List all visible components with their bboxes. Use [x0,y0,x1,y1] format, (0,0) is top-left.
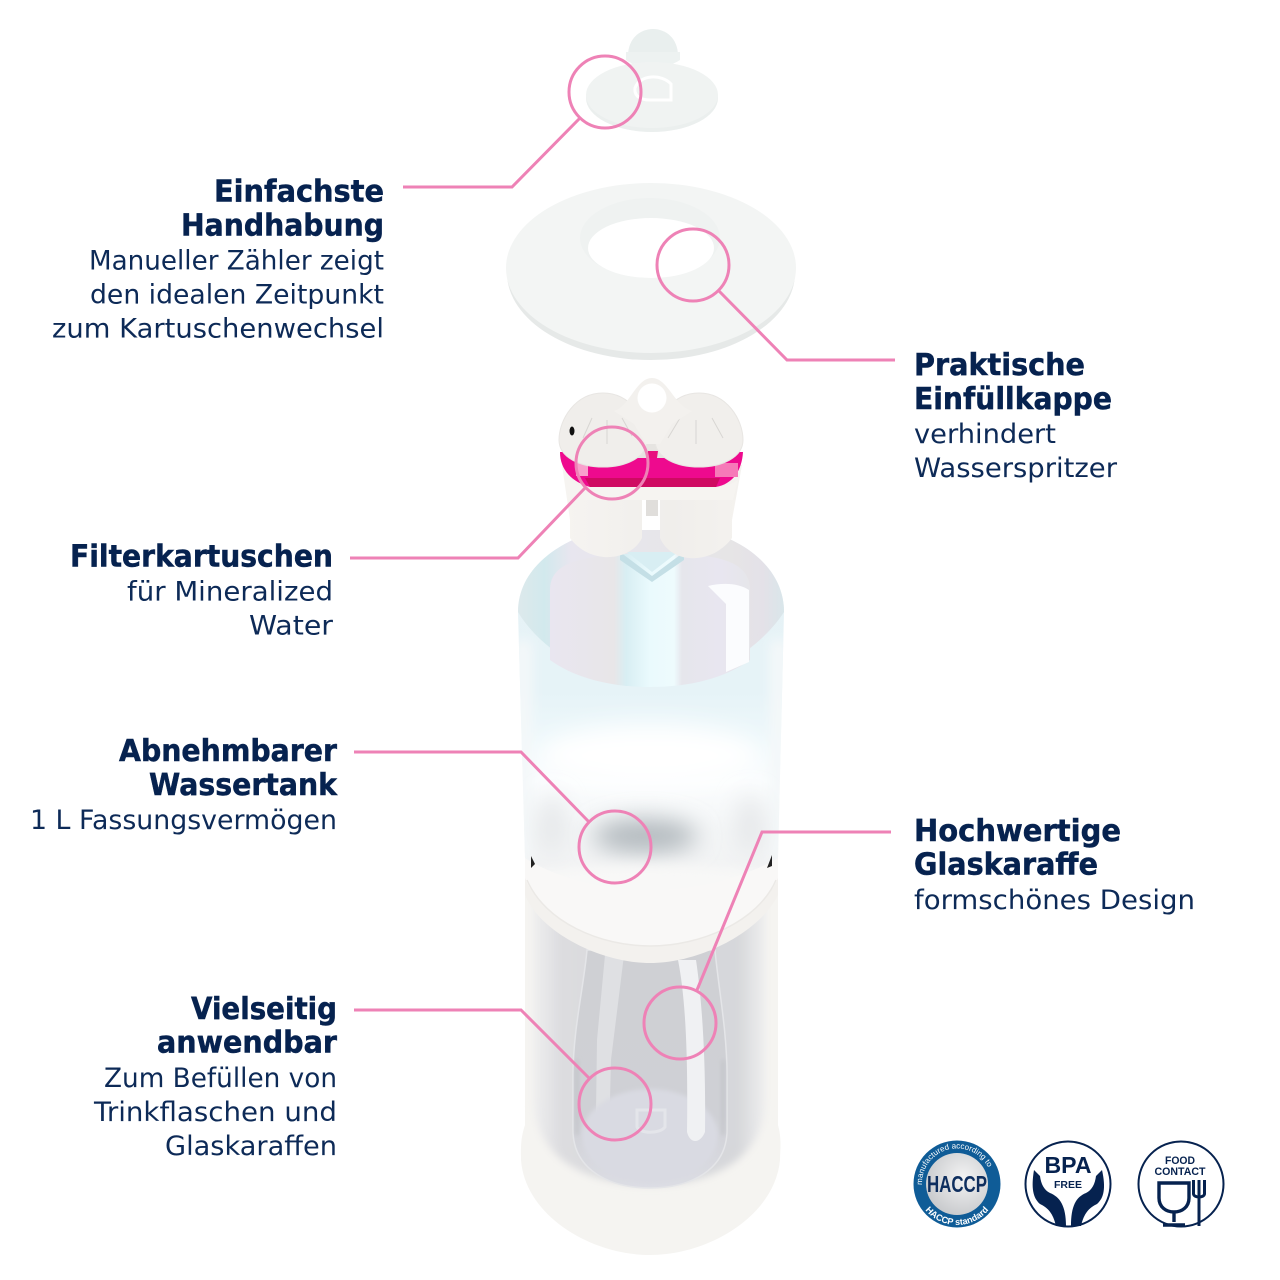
text: Hochwertige Glaskaraffe [914,814,1195,916]
text: Abnehmbarer Wassertank: 1 L Fassungsvermögen [30,805,337,836]
text: Vielseitig anwendbar: Trinkflaschen und [93,1097,337,1128]
text: Praktische Einfüllkappe [914,348,1117,484]
text: Abnehmbarer Wassertank: Wassertank [149,768,338,803]
image: filter cartridges [559,378,743,558]
text: Filterkartuschen: für Mineralized [127,576,333,608]
text: Filterkartuschen [70,540,333,642]
badge: HACCP: manufactured according to [918,1144,992,1184]
text: Einfachste Handhabung: zum Kartuschenwechsel [52,314,384,344]
image: carafe stand base [521,858,780,1255]
badge: HACCP [914,1140,1000,1228]
text: Einfachste Handhabung: Einfachste [214,174,384,210]
badge: BPA free: BPA [1044,1152,1092,1178]
text: Hochwertige Glaskaraffe: formschönes Design [914,885,1195,916]
icon: filling cap [506,183,796,360]
badge: food contact: CONTACT [1154,1166,1206,1178]
text: Praktische Einfüllkappe: verhindert [914,419,1056,450]
text: Hochwertige Glaskaraffe: Hochwertige [914,814,1121,849]
text: Praktische Einfüllkappe: Praktische [914,348,1085,383]
text: Vielseitig anwendbar [93,992,337,1162]
text: Filterkartuschen: Filterkartuschen [70,540,333,574]
text: Einfachste Handhabung: den idealen Zeitpunkt [90,280,384,310]
text: Abnehmbarer Wassertank: Abnehmbarer [119,734,337,769]
badge: BPA free: FREE [1054,1179,1082,1191]
text: Vielseitig anwendbar: anwendbar [157,1026,337,1060]
text: Vielseitig anwendbar: Zum Befüllen von [104,1063,337,1094]
carafe [573,950,727,1188]
callout: water tank [354,752,651,883]
text: Einfachste Handhabung [52,174,384,344]
badge: HACCP: HACCP [927,1171,987,1197]
text: Praktische Einfüllkappe: Einfüllkappe [914,382,1112,417]
badge: food contact [1138,1142,1224,1226]
text: Filterkartuschen: Water [249,610,333,642]
text: Vielseitig anwendbar: Glaskaraffen [165,1131,337,1162]
callout: filling cap [657,229,895,360]
text: Hochwertige Glaskaraffe: Glaskaraffe [914,848,1098,882]
text: Einfachste Handhabung: Handhabung [181,208,384,244]
icon: counter lid [586,29,718,132]
badge: HACCP: HACCP standard [926,1206,988,1225]
text: Einfachste Handhabung: Manueller Zähler zeigt [89,246,384,276]
text: Abnehmbarer Wassertank [30,734,338,836]
badge: food contact: FOOD [1165,1155,1195,1167]
badge: BPA free [1026,1142,1110,1226]
callout: counter lid [403,56,641,187]
callout: glass carafe [644,832,891,1059]
image: water tank [518,530,784,868]
text: Praktische Einfüllkappe: Wasserspritzer [914,453,1117,484]
callout: versatile use [354,1010,651,1140]
text: Vielseitig anwendbar: Vielseitig [191,992,337,1027]
callout: filter cartridges [350,427,648,558]
